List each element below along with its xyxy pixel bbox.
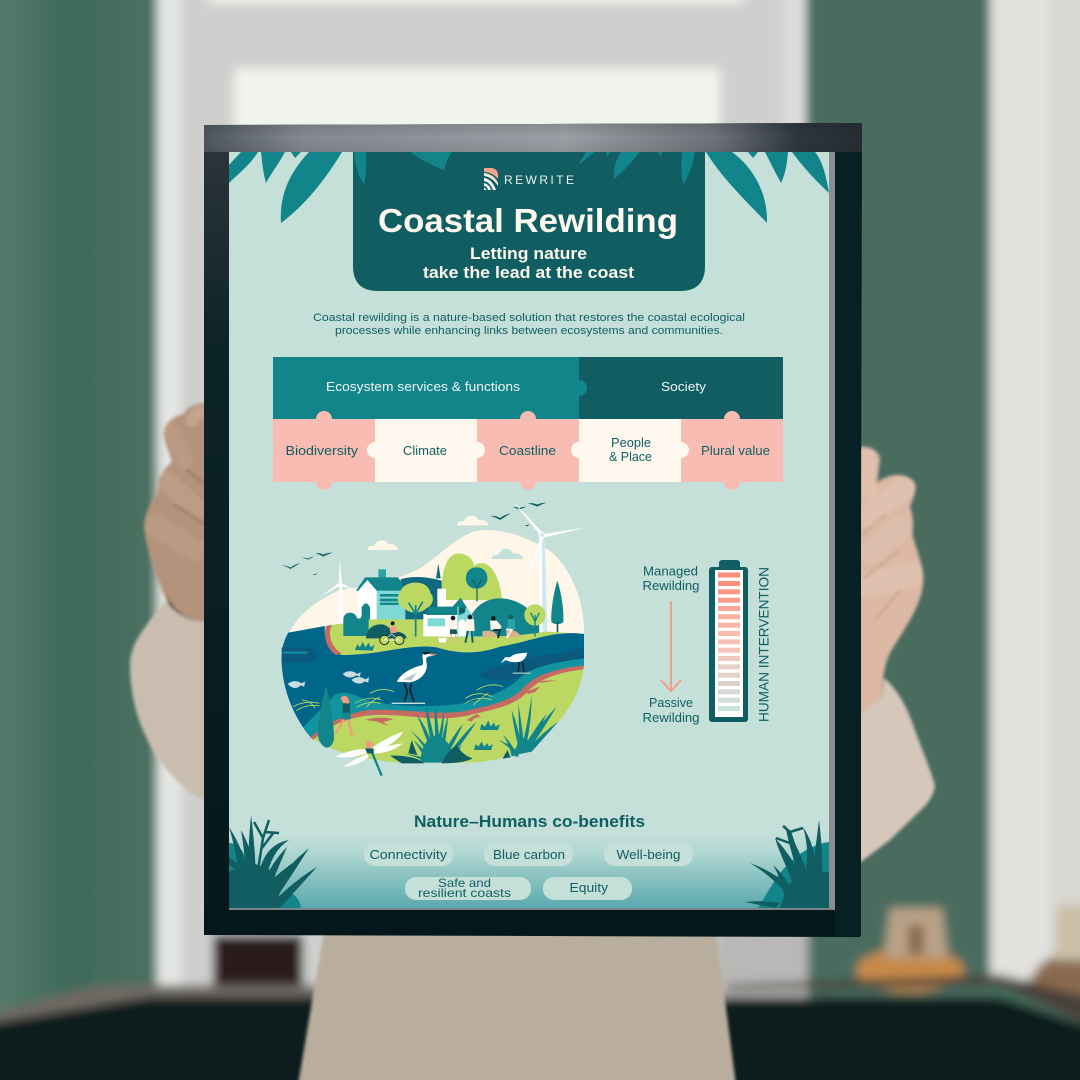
puzzle: climate [367,419,477,482]
logo wordmark: REWRITE [504,173,574,187]
battery gauge [709,560,748,722]
pill: equity [543,877,632,900]
puzzle labels: Plural value [701,444,770,458]
hills [401,553,547,637]
shoreline creeks [365,680,557,726]
left seaweed [229,815,317,908]
small tree and cypress [524,581,563,637]
puzzle: people and place: People [611,436,651,450]
right wind turbine [512,500,586,636]
flying birds [282,503,547,575]
darker water patches [282,647,584,680]
cyclist [366,621,407,645]
tree behind hill [466,567,487,602]
intervention scale labels: Managed [643,564,698,578]
puzzle diagram [273,357,783,490]
subtitle: take the lead at the coast [423,264,635,282]
logo mark [484,168,498,190]
fish [288,671,369,688]
model shirt torso [298,930,736,1080]
puzzle labels: Climate [403,444,447,458]
left house [356,569,406,621]
grass tufts [355,642,500,750]
intervention scale labels: Rewilding [642,579,700,593]
intro text: processes while enhancing links between ecosystems and communities. [335,325,723,337]
top foliage behind header [229,152,829,223]
right house [423,589,473,637]
arrow: managed to passive [661,601,681,691]
right seaweed [745,820,829,908]
intro text [313,312,745,337]
lower green bank [313,669,583,763]
clouds [367,515,523,559]
header panel [353,152,705,291]
green lawn bank [328,619,584,655]
right reed clump [498,695,558,759]
poster background [229,152,829,908]
puzzle: ecosystem services and functions: Ecosystem services & functions [326,380,520,394]
bushes beside house [343,613,369,636]
puzzle: society [579,357,783,419]
lower cypress [318,685,334,748]
puzzle: ecosystem services and functions [273,357,587,419]
walking woman [336,696,352,737]
vertical label: human intervention: HUMAN INTERVENTION [756,567,772,722]
people and dog [438,614,521,643]
subtitle: Letting nature [470,245,587,263]
dragonfly [336,732,403,776]
left hand and sleeve [130,403,206,802]
puzzle: biodiversity [273,411,375,490]
intro text: Coastal rewilding is a nature-based solution that restores the coastal ecological [313,312,745,324]
coastal landscape illustration [281,500,586,776]
title: Coastal Rewilding [378,202,678,239]
subtitle [423,245,635,282]
pill: safe and resilient coasts: resilient coasts [418,886,511,900]
sea grass [293,685,503,711]
shallow water band [303,658,584,738]
puzzle labels: Coastline [499,444,556,458]
pill: blue carbon: Blue carbon [493,848,565,862]
sky blob [283,530,584,663]
pill: safe and resilient coasts: Safe and [438,876,491,890]
right hand and sleeve [858,447,935,864]
pill: connectivity: Connectivity [370,848,448,862]
pill: connectivity [364,843,453,866]
small heron [501,653,531,674]
picture frame [204,123,862,937]
puzzle: people and place: & Place [609,450,652,464]
pill: safe and resilient coasts [405,876,531,900]
intervention scale labels: Rewilding [642,711,700,725]
large tree [398,583,433,637]
co-benefits heading: Nature–Humans co-benefits [414,812,645,831]
pill: blue carbon [484,843,573,866]
puzzle: society: Society [661,380,707,394]
puzzle: plural value [681,411,783,490]
left wind turbine [319,558,355,640]
pill: equity: Equity [570,881,609,895]
puzzle: people and place [571,419,689,482]
pill: well-being [604,843,693,866]
puzzle labels [286,444,770,458]
pill: well-being: Well-being [616,848,681,862]
intervention scale labels [642,564,700,725]
big central reed clump [390,702,477,763]
intervention scale labels: Passive [649,696,693,710]
large heron [392,652,437,704]
red shoreline [311,625,584,740]
header leaves [354,152,695,185]
puzzle: coastline [469,411,579,490]
water [281,626,584,738]
puzzle labels: Biodiversity [286,444,359,458]
